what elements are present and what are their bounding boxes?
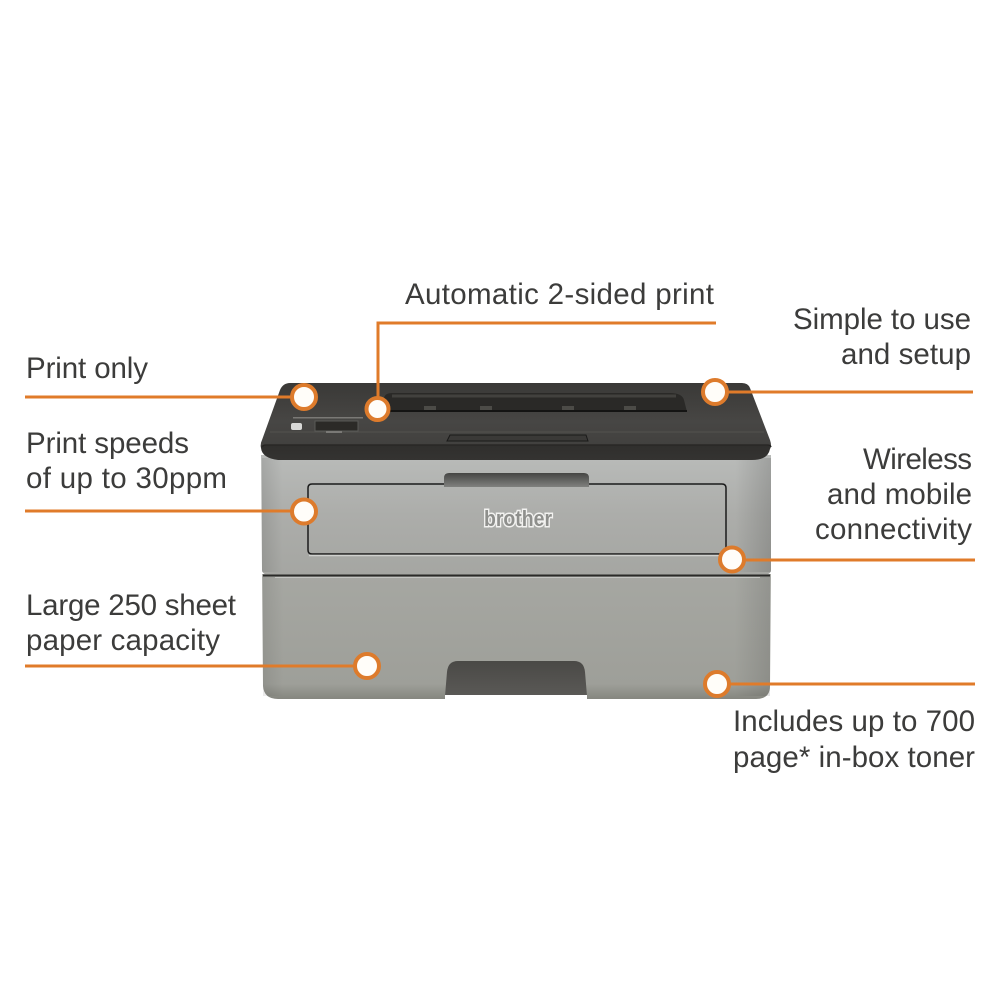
callout: paper capacity: [25, 589, 379, 678]
callout: print speeds: [25, 427, 316, 524]
printer: [261, 383, 771, 701]
callout: wireless: Wireless: [863, 443, 972, 476]
callout: toner: [705, 672, 975, 774]
front cover outline: [308, 484, 726, 554]
callout: automatic 2-sided print: [366, 278, 716, 420]
paper stop flap: [447, 435, 588, 441]
callout: simple to use: [703, 303, 973, 404]
brother logo: brother: [484, 506, 552, 531]
callout: print speeds: Print speeds: [26, 427, 189, 460]
callout: wireless: connectivity: [815, 513, 972, 546]
callout: print only: Print only: [26, 352, 148, 385]
printer middle body: [261, 455, 771, 578]
callout: paper capacity: paper capacity: [26, 624, 220, 657]
callout: simple to use: and setup: [841, 338, 971, 371]
printer lower paper tray: [262, 574, 771, 701]
cover handle: [444, 473, 589, 487]
tray handle notch: [445, 661, 587, 696]
callout: simple to use: Simple to use: [793, 303, 971, 336]
control panel: [291, 417, 363, 433]
callout: paper capacity: Large 250 sheet: [26, 589, 236, 622]
callout: toner: page* in-box toner: [733, 741, 975, 774]
callout: print only: [25, 352, 316, 409]
callout: wireless: and mobile: [827, 478, 972, 511]
callout: toner: Includes up to 700: [733, 705, 975, 738]
callout: automatic 2-sided print: Automatic 2-sided print: [405, 278, 714, 311]
callout: print speeds: of up to 30ppm: [26, 462, 227, 495]
output tray slot: [381, 393, 687, 412]
callout: wireless: [720, 443, 975, 572]
printer dark top: [261, 383, 771, 460]
